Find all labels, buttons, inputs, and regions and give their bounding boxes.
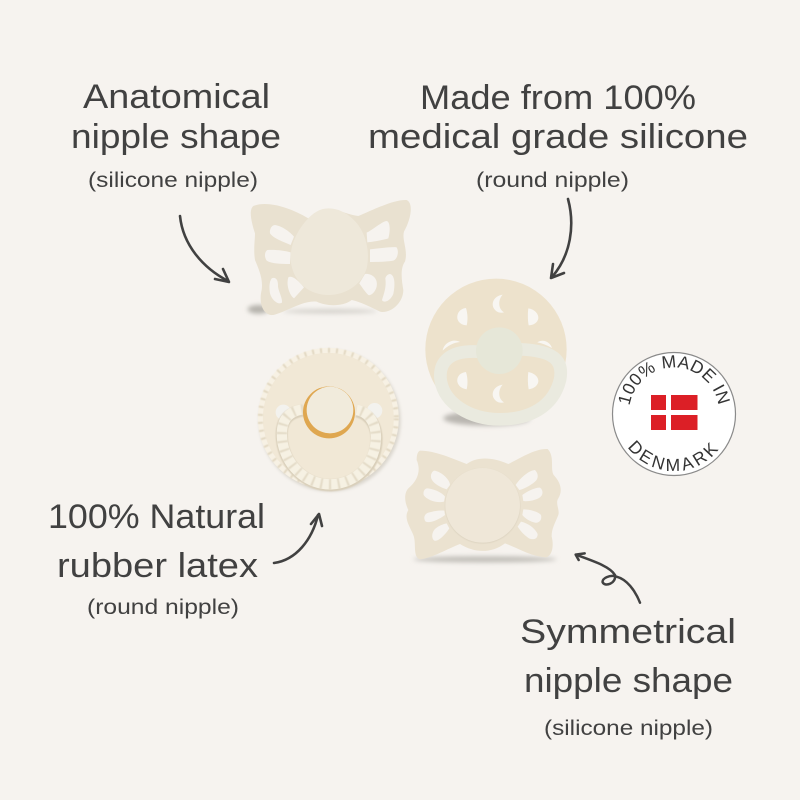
heading: anatomical nipple shape: (silicone nipple) bbox=[88, 169, 258, 192]
heading: natural rubber latex: 100% Natural bbox=[48, 498, 265, 536]
badge text: denmark: DENMARK bbox=[628, 440, 719, 471]
pacifier: butterfly anatomical bbox=[248, 200, 411, 315]
heading: anatomical nipple shape: Anatomical bbox=[83, 78, 270, 116]
heading: natural rubber latex: (round nipple) bbox=[87, 596, 239, 619]
arrow: medical silicone bbox=[551, 199, 571, 278]
heading: symmetrical nipple shape: Symmetrical bbox=[520, 613, 736, 651]
arrow: natural rubber bbox=[274, 514, 322, 563]
pacifier: symmetrical bbox=[405, 449, 561, 562]
icon: danish flag bbox=[651, 395, 698, 430]
badge: made in denmark bbox=[612, 352, 736, 476]
heading: symmetrical nipple shape: (silicone nipple) bbox=[544, 717, 713, 740]
arrow: anatomical bbox=[180, 216, 229, 282]
heading: anatomical nipple shape bbox=[71, 78, 281, 192]
badge text: 100% made in: 100% MADE IN bbox=[618, 355, 730, 404]
heading: made from medical grade silicone: (round nipple) bbox=[476, 169, 629, 192]
heading: symmetrical nipple shape bbox=[520, 613, 736, 740]
heading: natural rubber latex: rubber latex bbox=[57, 547, 258, 585]
pacifier: moon glow bbox=[425, 279, 567, 426]
heading: made from medical grade silicone: Made from 100% bbox=[420, 79, 696, 117]
pacifier: rope latex bbox=[259, 349, 401, 491]
heading: symmetrical nipple shape: nipple shape bbox=[524, 662, 733, 700]
heading: made from medical grade silicone: medical grade silicone bbox=[368, 118, 748, 156]
heading: natural rubber latex bbox=[48, 498, 265, 619]
heading: anatomical nipple shape: nipple shape bbox=[71, 118, 281, 156]
arrow: symmetrical bbox=[576, 553, 640, 603]
heading: made from medical grade silicone bbox=[368, 79, 748, 192]
